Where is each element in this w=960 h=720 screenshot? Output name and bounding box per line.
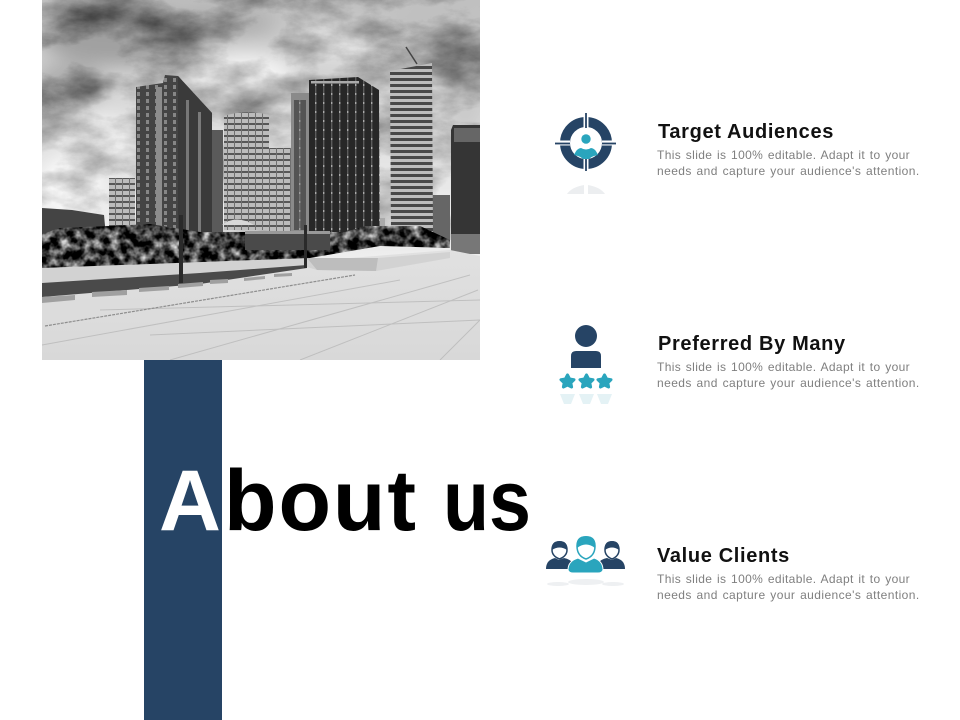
title: About us: A: [159, 453, 221, 549]
text: Value Clients body: This slide is 100% editable. Adapt it to your: [657, 572, 910, 586]
heading: Value Clients: Value Clients: [657, 545, 790, 567]
low wall and hedge: [42, 252, 450, 303]
text: Value Clients body: needs and capture your audience's attention.: [657, 588, 920, 602]
title: About us: [159, 453, 531, 549]
heading: Preferred By Many: Preferred By Many: [658, 333, 846, 355]
dark tower: [291, 77, 380, 244]
heading: Target Audiences: Target Audiences: [658, 121, 834, 143]
text: Preferred By Many body: [657, 360, 920, 390]
far towers: [109, 130, 450, 245]
title: About us: bout: [224, 453, 416, 549]
tall tower left: [136, 75, 212, 236]
sky with clouds: [34, 0, 490, 260]
icon: person with three stars: [559, 325, 612, 404]
text: Preferred By Many body: needs and capture your audience's attention.: [657, 376, 920, 390]
icon: target audience: [555, 113, 616, 194]
text: Target Audiences body: needs and capture your audience's attention.: [657, 164, 920, 178]
text: Target Audiences body: This slide is 100% editable. Adapt it to your: [657, 148, 910, 162]
navy vertical bar: [144, 360, 222, 720]
mid white tower: [224, 112, 269, 230]
right tower: [451, 125, 480, 254]
trees and low building: [42, 208, 452, 283]
text: Value Clients body: [657, 572, 920, 602]
photo: black and white city skyline: [42, 0, 480, 360]
text: Target Audiences body: [657, 148, 920, 178]
text: Preferred By Many body: This slide is 100% editable. Adapt it to your: [657, 360, 910, 374]
plaza ground: [42, 250, 480, 360]
icon: three clients: [546, 536, 625, 586]
striped tower: [390, 47, 433, 236]
title: About us: us: [443, 453, 531, 549]
